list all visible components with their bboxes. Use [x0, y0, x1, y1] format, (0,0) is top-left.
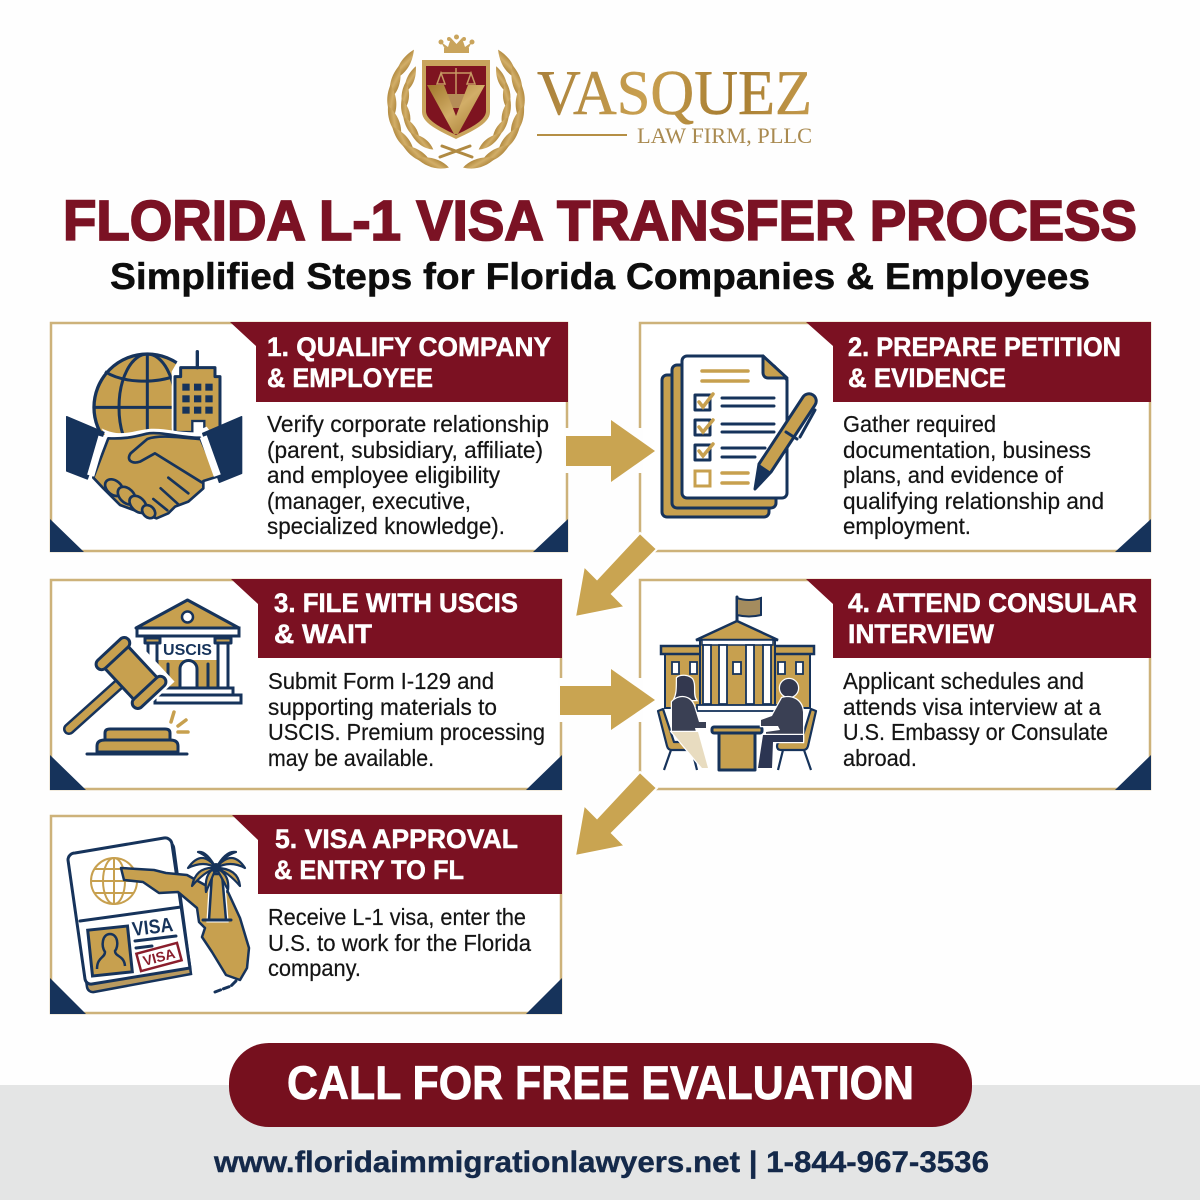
step 2 text: plans, and evidence of	[843, 462, 1064, 488]
logo subtitle: LAW FIRM, PLLC	[637, 123, 812, 148]
step 3 text: USCIS. Premium processing	[268, 719, 545, 745]
step 5 text: Receive L-1 visa, enter the	[268, 904, 526, 930]
step 4 text: abroad.	[843, 745, 917, 771]
step 3 heading: 3. FILE WITH USCIS	[274, 588, 518, 618]
step 5 text: U.S. to work for the Florida	[268, 930, 531, 956]
step 1 header	[230, 322, 568, 402]
step 2 text: employment.	[843, 513, 971, 539]
step 2 text	[843, 411, 1104, 539]
call to action button	[229, 1043, 972, 1127]
contact line: www.floridaimmigrationlawyers.net | 1-844-967-3536	[213, 1146, 989, 1179]
icon: globe, building and handshake	[67, 352, 242, 521]
step 3 text: supporting materials to	[268, 694, 497, 720]
step 2 text: documentation, business	[843, 437, 1091, 463]
step 5 text: company.	[268, 955, 361, 981]
icon: passport, Florida map and palm	[68, 838, 249, 992]
step 2 text: qualifying relationship and	[843, 488, 1104, 514]
panel: step 3	[50, 579, 562, 790]
panel: step 5	[50, 815, 562, 1014]
step 4 heading	[848, 588, 1137, 649]
step 1 text: specialized knowledge).	[267, 513, 505, 539]
step 5 text	[268, 904, 531, 981]
step 3 text	[268, 668, 545, 771]
step 4 text: Applicant schedules and	[843, 668, 1084, 694]
step 1 heading: 1. QUALIFY COMPANY	[267, 332, 551, 362]
step 1 text: and employee eligibility	[267, 462, 500, 488]
step 3 text: Submit Form I-129 and	[268, 668, 494, 694]
step 4 text: U.S. Embassy or Consulate	[843, 719, 1108, 745]
step 5 heading: 5. VISA APPROVAL	[275, 824, 518, 854]
icon: embassy and interview table	[658, 597, 816, 770]
step 4 header	[806, 579, 1151, 658]
icon: USCIS courthouse and gavel: USCIS	[163, 642, 212, 659]
step 2 heading	[848, 332, 1121, 393]
call to action button: CALL FOR FREE EVALUATION	[287, 1056, 914, 1109]
step 1 heading	[267, 332, 551, 393]
icon: USCIS courthouse and gavel	[69, 600, 241, 754]
step 2 header	[806, 322, 1151, 402]
step 1 text	[267, 411, 549, 539]
step 1 heading: & EMPLOYEE	[267, 363, 433, 393]
step 5 header	[232, 815, 562, 894]
icon: shield	[422, 60, 490, 139]
step 1 text: Verify corporate relationship	[267, 411, 549, 437]
step 4 text	[843, 668, 1108, 771]
step 4 heading: INTERVIEW	[848, 619, 995, 649]
step 5 heading: & ENTRY TO FL	[274, 855, 464, 885]
panel: step 2	[640, 322, 1151, 552]
arrow: step 4 to step 5	[575, 772, 657, 856]
step 2 heading: 2. PREPARE PETITION	[848, 332, 1121, 362]
step 3 text: may be available.	[268, 745, 434, 771]
arrow: step 1 to step 2	[566, 420, 655, 482]
step 5 heading	[274, 824, 518, 885]
icon: laurel wreath	[384, 47, 528, 172]
title: FLORIDA L-1 VISA TRANSFER PROCESS	[63, 189, 1137, 253]
step 4 text: attends visa interview at a	[843, 694, 1101, 720]
logo wordmark: VASQUEZ	[537, 57, 812, 128]
icon: passport, Florida map and palm: VISA	[141, 945, 177, 969]
step 3 header	[231, 579, 562, 658]
icon: crown	[438, 34, 474, 53]
icon: passport, Florida map and palm: VISA	[131, 914, 174, 941]
step 1 text: (parent, subsidiary, affiliate)	[267, 437, 543, 463]
footer band	[0, 1085, 1200, 1200]
icon: document checklist and pen	[662, 356, 816, 517]
step 2 heading: & EVIDENCE	[848, 363, 1006, 393]
step 3 heading	[274, 588, 518, 649]
panel: step 4	[640, 579, 1151, 790]
subtitle: Simplified Steps for Florida Companies & Employees	[110, 256, 1090, 297]
step 3 heading: & WAIT	[274, 619, 373, 649]
step 2 text: Gather required	[843, 411, 996, 437]
step 1 text: (manager, executive,	[267, 488, 471, 514]
logo	[384, 34, 812, 172]
panel: step 1	[50, 322, 568, 552]
step 4 heading: 4. ATTEND CONSULAR	[848, 588, 1137, 618]
arrow: step 3 to step 4	[560, 669, 655, 730]
arrow: step 2 to step 3	[575, 533, 657, 617]
